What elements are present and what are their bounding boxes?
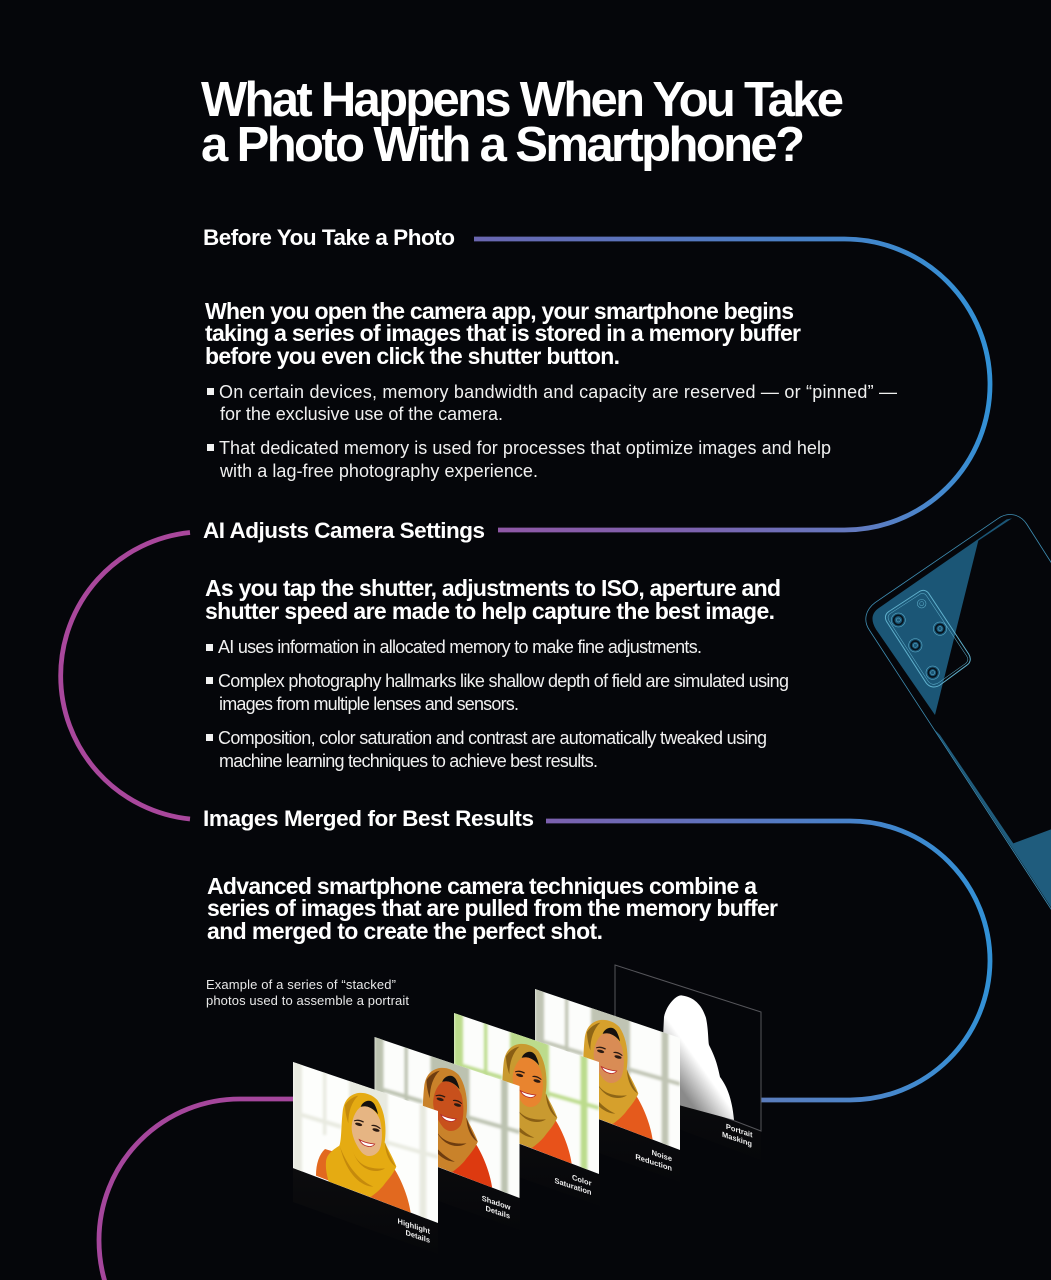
bullet list <box>207 382 897 481</box>
caption: Example of a series of “stacked” <box>206 977 396 992</box>
phone outline <box>866 515 1051 910</box>
photo layer: noise reduction: Noise <box>652 1148 673 1164</box>
lead text: taking a series of images that is stored in a memory buffer <box>205 320 801 346</box>
icon: smartphone outline <box>866 515 1051 910</box>
lead text <box>205 298 801 369</box>
bullet list <box>206 637 789 771</box>
photo stack <box>293 965 761 1254</box>
bullet list: That dedicated memory is used for processes that optimize images and help <box>219 438 831 458</box>
lead text: series of images that are pulled from the memory buffer <box>207 895 778 921</box>
phone blue fill <box>872 518 1012 715</box>
photo layer: highlight details: Highlight <box>398 1216 430 1236</box>
lead text: shutter speed are made to help capture the best image. <box>205 598 775 624</box>
lenses <box>891 599 947 679</box>
timeline ribbon <box>61 239 990 1280</box>
phone lower edge <box>935 730 1051 907</box>
photo layer: noise reduction: Reduction <box>635 1152 672 1173</box>
lead text: Advanced smartphone camera techniques combine a <box>207 873 757 899</box>
caption <box>206 977 409 1008</box>
title: a Photo With a Smartphone? <box>201 118 805 172</box>
lead text: When you open the camera app, your smartphone begins <box>205 298 794 324</box>
lead text: As you tap the shutter, adjustments to ISO, aperture and <box>205 575 781 601</box>
bullet list: Complex photography hallmarks like shallow depth of field are simulated using <box>218 671 789 691</box>
lead text <box>205 575 781 624</box>
bullet list: On certain devices, memory bandwidth and capacity are reserved — or “pinned” — <box>219 382 897 402</box>
caption: photos used to assemble a portrait <box>206 993 409 1008</box>
photo layer: noise reduction <box>535 982 681 1182</box>
heading: Before You Take a Photo <box>203 225 455 250</box>
panel: before you take a photo <box>203 225 897 481</box>
photo layer: color saturation <box>454 1006 600 1206</box>
photo layer: highlight details <box>293 1055 439 1254</box>
lead text <box>207 873 778 944</box>
bullet list: Composition, color saturation and contrast are automatically tweaked using <box>218 728 767 748</box>
panel: images merged for best results <box>203 806 778 1008</box>
bullet list: for the exclusive use of the camera. <box>220 404 503 424</box>
title: What Happens When You Take <box>201 73 844 127</box>
lead text: and merged to create the perfect shot. <box>207 918 603 944</box>
panel: AI adjusts camera settings <box>203 518 789 771</box>
bullet list: machine learning techniques to achieve best results. <box>219 751 598 771</box>
photo layer: shadow details <box>374 1037 520 1218</box>
bullet list: AI uses information in allocated memory to make fine adjustments. <box>218 637 702 657</box>
photo layer: highlight details: Details <box>405 1228 430 1245</box>
camera module <box>885 590 970 687</box>
heading: Images Merged for Best Results <box>203 806 534 831</box>
lead text: before you even click the shutter button. <box>205 343 620 369</box>
heading: AI Adjusts Camera Settings <box>203 518 485 543</box>
bullet list: images from multiple lenses and sensors. <box>219 694 519 714</box>
photo layer: color saturation: Saturation <box>554 1176 592 1197</box>
photo layer: portrait masking <box>615 965 761 1160</box>
title <box>201 73 844 172</box>
bullet list: with a lag-free photography experience. <box>219 461 538 481</box>
photo layer: portrait masking: Portrait <box>726 1122 753 1140</box>
photo layer: shadow details: Shadow <box>482 1194 511 1212</box>
photo layer: color saturation: Color <box>572 1173 592 1188</box>
photo layer: portrait masking: Masking <box>722 1130 752 1149</box>
photo layer: shadow details: Details <box>485 1204 510 1221</box>
